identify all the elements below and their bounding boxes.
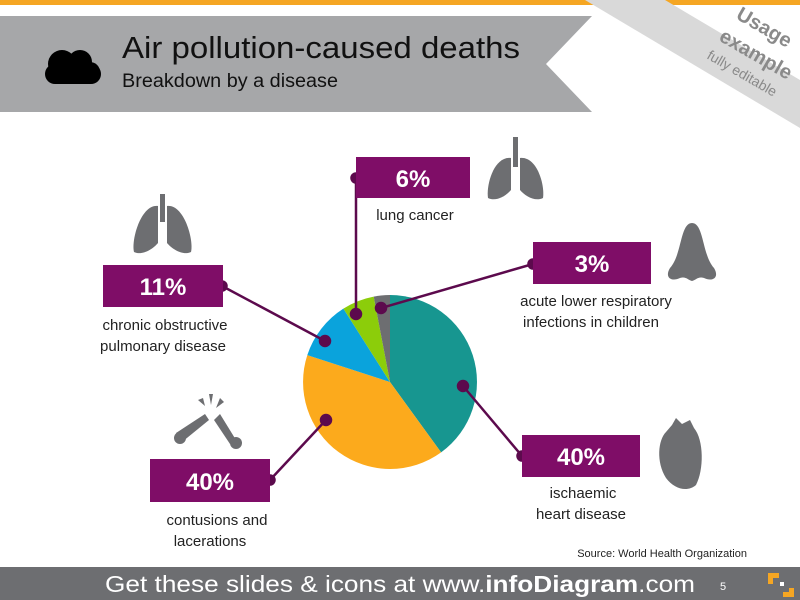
label: acute lower respiratory: infections in children <box>523 314 659 331</box>
connector lines <box>218 174 538 484</box>
label: ischaemic heart disease: heart disease <box>536 506 626 523</box>
usage example ribbon <box>585 0 800 128</box>
label: lung cancer: lung cancer <box>376 207 454 224</box>
label: COPD: pulmonary disease <box>100 338 226 355</box>
footer: Get these slides & icons at www. infoDiagram .com <box>105 571 695 597</box>
icon: heart <box>659 418 702 489</box>
label: ischaemic heart disease: ischaemic <box>550 485 617 502</box>
label: ischaemic heart disease <box>522 435 640 523</box>
usage example ribbon: example <box>716 25 796 84</box>
label: contusions: lacerations <box>174 533 246 550</box>
label: acute lower respiratory <box>520 242 672 331</box>
icon: lungs left <box>133 194 192 253</box>
usage example ribbon: Usage <box>732 3 795 52</box>
label: acute lower respiratory: 3% <box>575 251 609 278</box>
usage example ribbon: fully editable <box>704 47 780 100</box>
pie chart <box>303 295 477 469</box>
footer <box>0 567 800 600</box>
icon: cloud <box>45 50 101 84</box>
title: Air pollution-caused deaths <box>122 30 520 65</box>
label: COPD: chronic obstructive <box>102 317 228 334</box>
label: ischaemic heart disease: 40% <box>557 444 605 471</box>
label: contusions: 40% <box>186 469 234 496</box>
subtitle: Breakdown by a disease <box>122 71 338 92</box>
label: lung cancer <box>356 157 470 224</box>
label: COPD <box>100 265 228 355</box>
source: Source: World Health Organization <box>577 548 747 560</box>
icon: lungs top <box>488 137 543 199</box>
label: lung cancer: 6% <box>396 166 430 193</box>
header banner <box>0 16 592 112</box>
label: contusions <box>150 459 270 550</box>
label: acute lower respiratory: acute lower respiratory <box>520 293 672 310</box>
icon: broken bone <box>174 394 242 449</box>
label: contusions: contusions and <box>167 512 267 529</box>
icon: nose <box>668 223 716 281</box>
label: COPD: 11% <box>140 274 186 301</box>
top orange line <box>0 0 800 5</box>
footer: 5 <box>720 581 726 593</box>
